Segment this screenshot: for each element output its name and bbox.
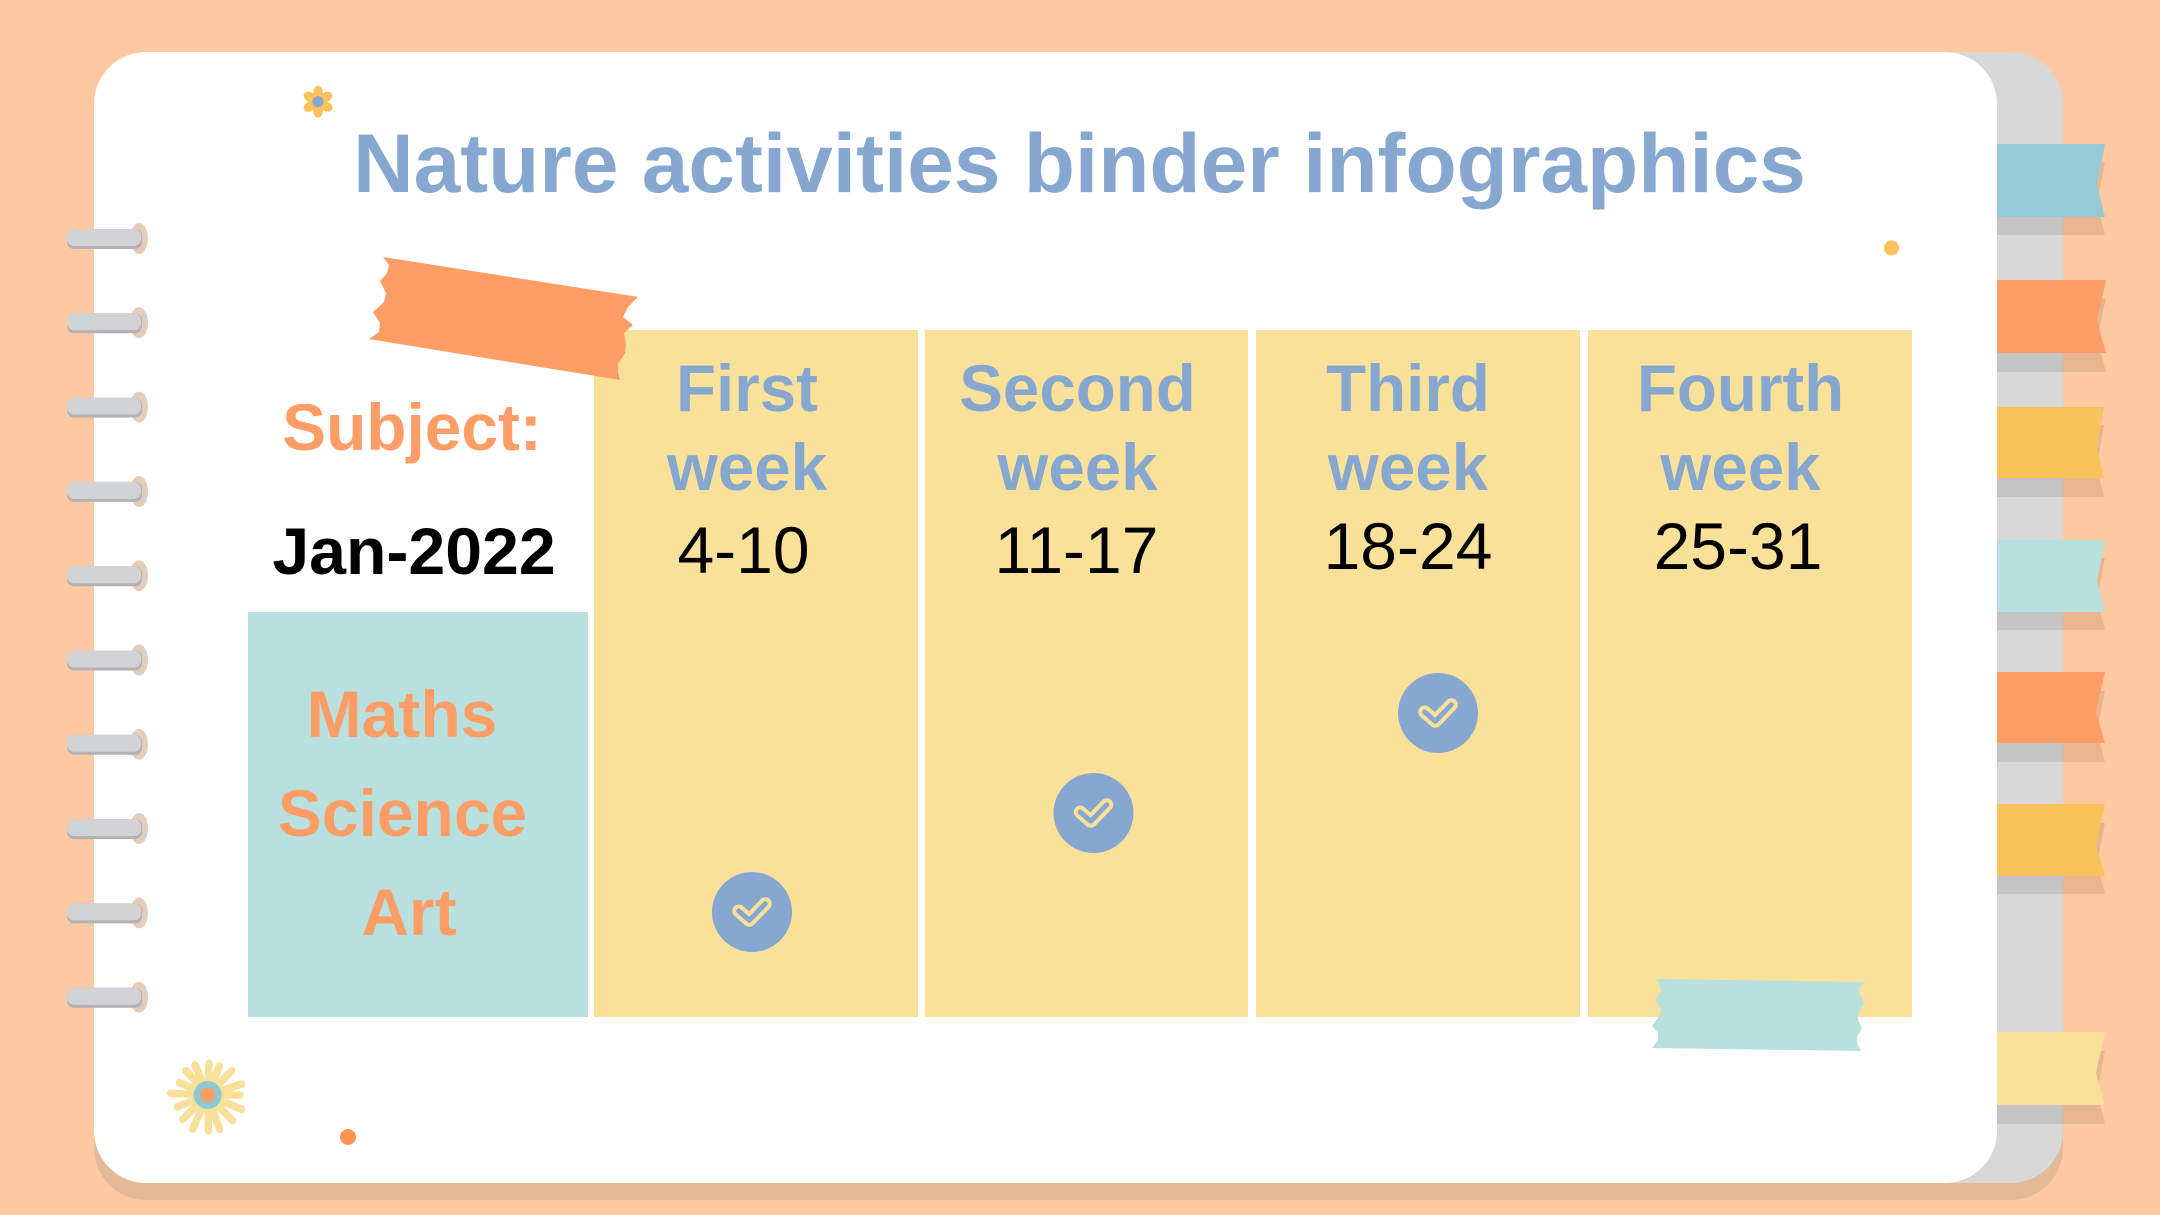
icon: check science second week	[1054, 773, 1134, 853]
first week header: First	[676, 352, 818, 425]
icon: small flower	[302, 86, 334, 118]
panel: first week column	[594, 330, 918, 1017]
tab: pale yellow	[1997, 1032, 2105, 1124]
ring 8	[67, 813, 148, 844]
month label: Jan-2022	[272, 515, 556, 589]
tab: aqua	[1997, 540, 2105, 630]
third week header	[1324, 352, 1492, 583]
ring 6	[67, 644, 148, 676]
subject heading: Subject:	[282, 390, 542, 464]
fourth week header: Fourth	[1637, 352, 1844, 425]
tab: orange	[1997, 280, 2106, 372]
washi tape: orange	[369, 257, 638, 380]
ring 3	[67, 392, 148, 423]
first week header	[666, 352, 828, 587]
tab: amber	[1997, 407, 2104, 497]
subject: art: Art	[361, 875, 457, 949]
ring 9	[67, 897, 148, 928]
second week header: 11-17	[995, 513, 1158, 587]
subject list	[278, 677, 527, 949]
first week header: week	[666, 431, 828, 504]
second week header: Second	[959, 352, 1196, 425]
subject: maths: Maths	[307, 677, 497, 751]
third week header: week	[1327, 431, 1489, 504]
title: Nature activities binder infographics	[353, 116, 1806, 210]
fourth week header: 25-31	[1654, 509, 1822, 583]
panel: second week column	[925, 330, 1248, 1017]
binder back page	[1800, 52, 2063, 1183]
tab: orange lower	[1997, 672, 2105, 762]
fourth week header	[1637, 352, 1844, 583]
third week header: 18-24	[1324, 509, 1492, 583]
ring 10	[67, 982, 148, 1013]
decorative dot: orange	[340, 1129, 356, 1145]
second week header: week	[996, 431, 1158, 504]
panel: fourth week column	[1588, 330, 1912, 1017]
ring 5	[67, 560, 148, 591]
subject: science: Science	[278, 776, 527, 850]
ring 4	[67, 476, 148, 507]
panel: subject column	[248, 612, 588, 1017]
ring 1	[67, 223, 148, 254]
washi tape: aqua	[1652, 979, 1865, 1051]
fourth week header: week	[1659, 431, 1821, 504]
first week header: 4-10	[677, 513, 810, 587]
icon: check art third week	[1398, 673, 1478, 753]
binder tabs	[1997, 144, 2106, 1124]
tab: blue	[1997, 144, 2105, 235]
panel: third week column	[1256, 330, 1580, 1017]
ring 2	[67, 307, 148, 338]
spiral binding rings	[67, 223, 148, 1013]
second week header	[959, 352, 1196, 587]
tab: amber lower	[1997, 804, 2105, 894]
icon: check maths first week	[712, 872, 792, 952]
third week header: Third	[1326, 352, 1490, 425]
icon: sun flower	[171, 1063, 242, 1131]
ring 7	[67, 729, 148, 760]
decorative dot: amber	[1884, 240, 1899, 256]
